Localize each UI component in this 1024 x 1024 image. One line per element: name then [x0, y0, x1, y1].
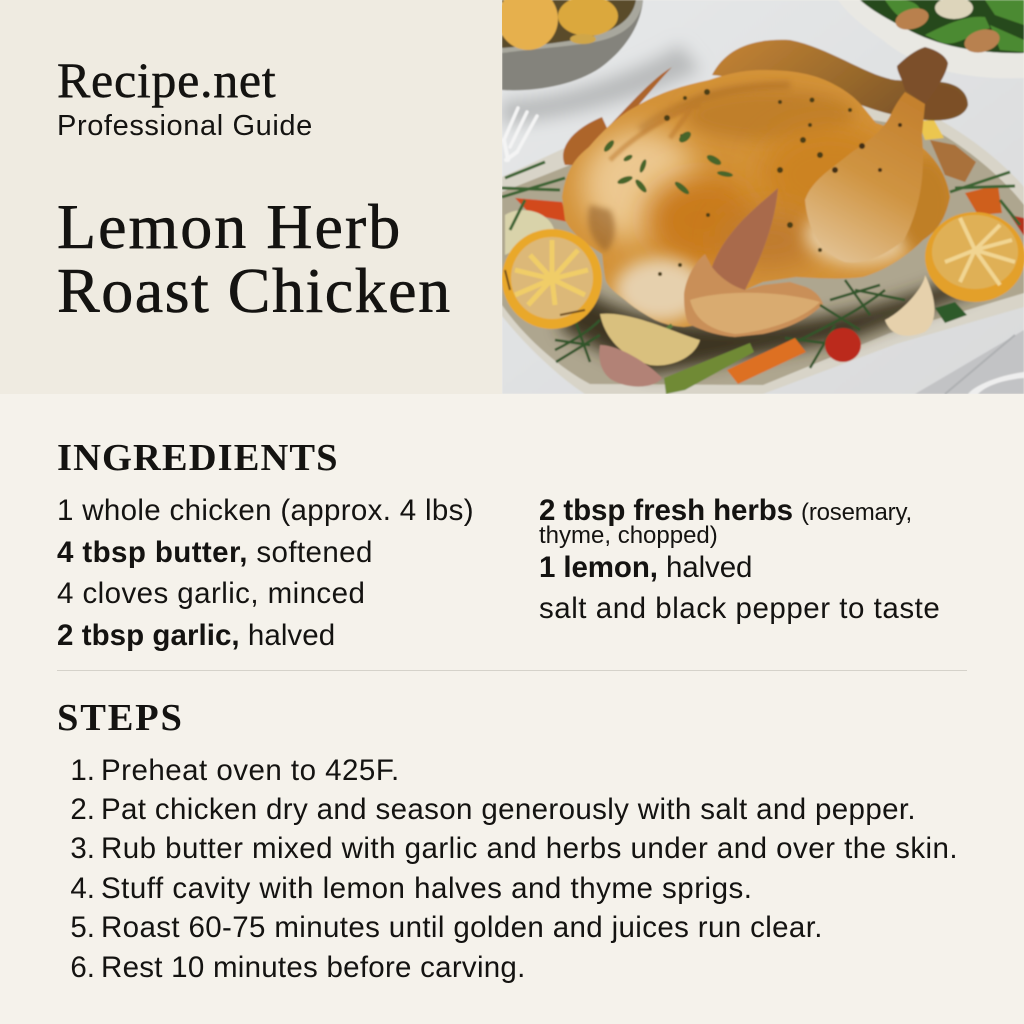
- subtitle: Professional Guide: [57, 110, 313, 142]
- fork: [504, 108, 537, 160]
- back drumstick: [712, 40, 968, 120]
- ingredients left column: [57, 494, 474, 652]
- ingredients left column: 4 cloves garlic, minced: [57, 577, 365, 610]
- brand name: Recipe.net: [57, 52, 276, 108]
- bowl with lemons: [498, 0, 643, 90]
- shallot: [599, 345, 662, 387]
- divider: [57, 670, 967, 671]
- marble table: [502, 0, 1024, 394]
- ingredients left column: 2 tbsp garlic, halved: [57, 619, 335, 652]
- title: Roast Chicken: [57, 255, 452, 326]
- ingredients left column: 1 whole chicken (approx. 4 lbs): [57, 494, 474, 527]
- photo: roast chicken on a platter: [502, 0, 1024, 394]
- salad plate top right: [838, 0, 1024, 78]
- section heading: ingredients: INGREDIENTS: [57, 437, 339, 479]
- steps list: Pat chicken dry and season generously with salt and pepper.: [101, 793, 916, 826]
- ingredients left column: 4 tbsp butter, softened: [57, 536, 373, 569]
- leaf: [935, 302, 967, 323]
- lemon left: [502, 229, 602, 329]
- title: [57, 191, 452, 326]
- ingredients right column: salt and black pepper to taste: [539, 592, 940, 625]
- vegetables behind the chicken: [502, 120, 1024, 255]
- section heading: steps: STEPS: [57, 697, 184, 739]
- ingredients right column: 2 tbsp fresh herbs (rosemary,: [539, 494, 912, 527]
- front wing: [684, 188, 823, 337]
- platter: [502, 105, 1024, 394]
- steps list: Stuff cavity with lemon halves and thyme sprigs.: [101, 872, 752, 905]
- lemon right: [925, 212, 1024, 302]
- bowl shadow: [502, 45, 700, 125]
- tomato: [825, 328, 861, 362]
- steps list: 6.: [70, 951, 95, 984]
- ingredients right column: 1 lemon, halved: [539, 551, 752, 584]
- steps list: [70, 754, 958, 984]
- steps list: 3.: [70, 832, 95, 865]
- leek: [664, 343, 754, 394]
- ingredients right column: thyme, chopped): [539, 522, 718, 549]
- title: Lemon Herb: [57, 191, 402, 262]
- panel: header background: [0, 0, 502, 394]
- steps list: 5.: [70, 911, 95, 944]
- steps list: Roast 60-75 minutes until golden and juices run clear.: [101, 911, 823, 944]
- carrot: [727, 338, 806, 384]
- steps list: 1.: [70, 754, 95, 787]
- steps list: Rub butter mixed with garlic and herbs under and over the skin.: [101, 832, 958, 865]
- steps list: 4.: [70, 872, 95, 905]
- seasoning specks and herbs: [657, 88, 853, 277]
- chicken body: [562, 70, 951, 328]
- onion wedge: [600, 314, 700, 366]
- right table cutlery and napkin: [915, 330, 1024, 394]
- herbs around the platter: [555, 280, 905, 368]
- steps list: 2.: [70, 793, 95, 826]
- ingredients right column: [539, 494, 940, 625]
- steps list: Preheat oven to 425F.: [101, 754, 400, 787]
- garlic: [885, 275, 934, 336]
- right leg: [805, 47, 948, 263]
- steps list: Rest 10 minutes before carving.: [101, 951, 526, 984]
- back wing tip: [563, 67, 672, 165]
